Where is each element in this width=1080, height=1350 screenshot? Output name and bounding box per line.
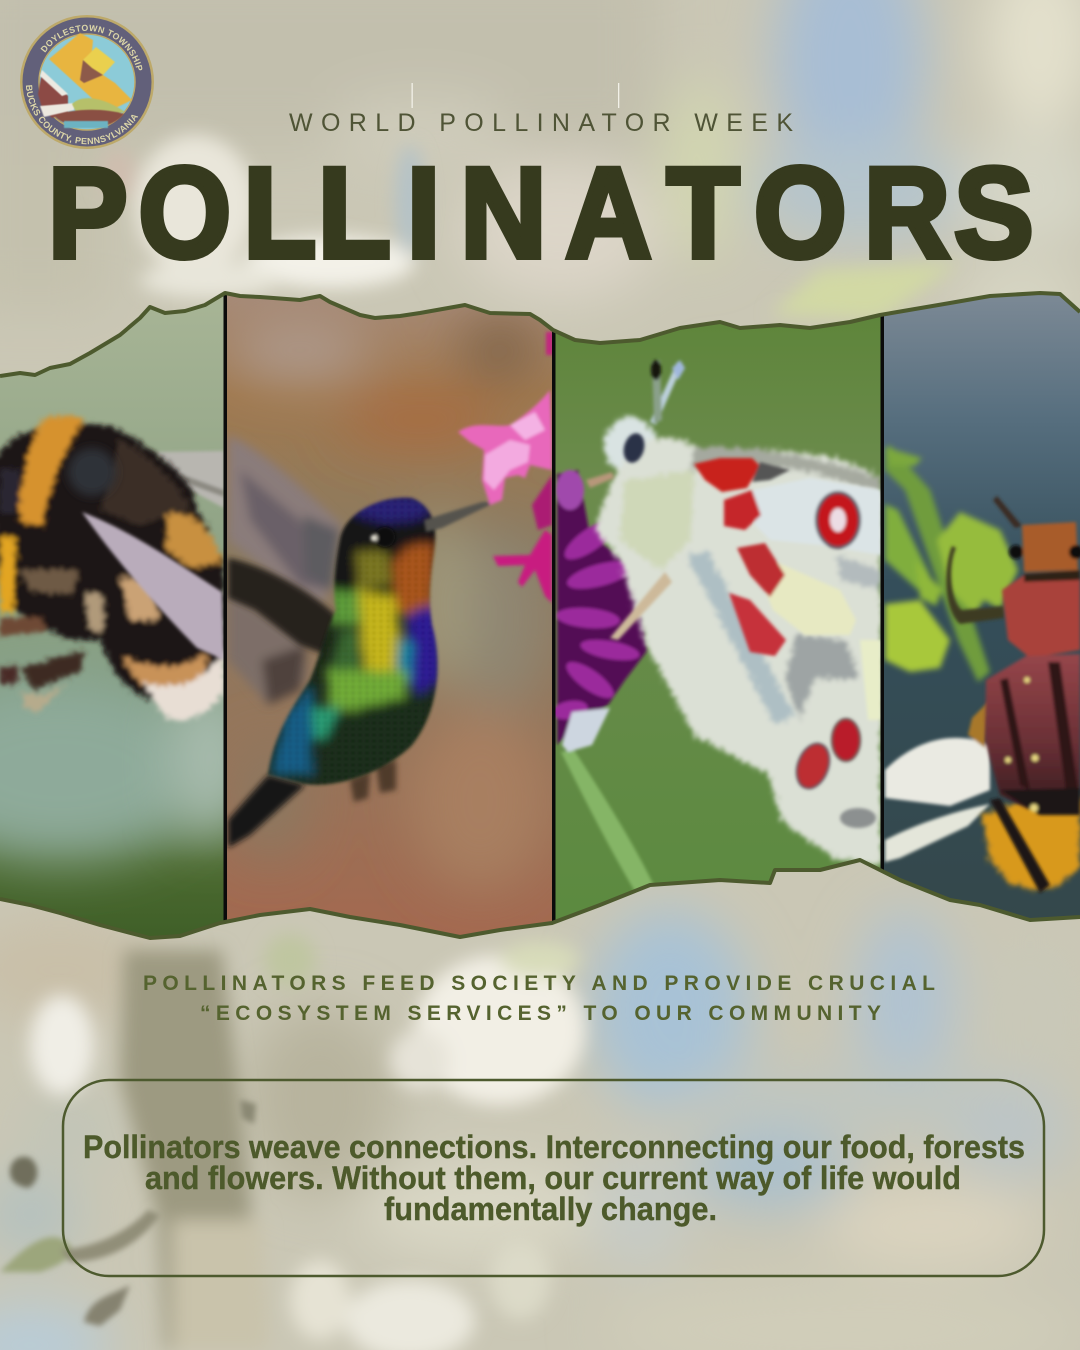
subtitle: POLLINATORS FEED SOCIETY AND PROVIDE CRUCIAL — [143, 972, 935, 995]
seal: Doylestown Township logo — [20, 15, 154, 149]
callout text: and flowers. Without them, our current way of life would — [145, 1160, 961, 1196]
photo: flower beetle — [883, 290, 1080, 940]
eyebrow: world pollinator week: WORLD POLLINATOR WEEK — [289, 109, 793, 137]
title: POLLINATORS — [48, 142, 1034, 285]
bird wings — [228, 435, 342, 705]
photo dividers — [224, 290, 884, 940]
torn edge outlines — [0, 293, 1080, 938]
callout text — [83, 1129, 1025, 1227]
photo: hummingbird — [226, 290, 556, 940]
callout text: Pollinators weave connections. Interconnecting our food, forests — [83, 1129, 1025, 1165]
photo strip with torn edges — [0, 290, 1080, 940]
pink flower — [458, 390, 552, 505]
photo: apollo butterfly — [551, 290, 885, 940]
bird body — [266, 495, 440, 788]
small tick marks above eyebrow — [412, 83, 619, 108]
subtitle — [143, 972, 935, 1025]
subtitle: “ECOSYSTEM SERVICES” TO OUR COMMUNITY — [200, 1002, 881, 1025]
seal lettering: DOYLESTOWN TOWNSHIP — [40, 24, 142, 70]
seal: Doylestown Township logo: BUCKS COUNTY, PENNSYLVANIA — [26, 85, 138, 144]
callout box — [63, 1080, 1044, 1276]
callout text: fundamentally change. — [384, 1191, 717, 1227]
photo: bumblebee — [0, 296, 224, 936]
